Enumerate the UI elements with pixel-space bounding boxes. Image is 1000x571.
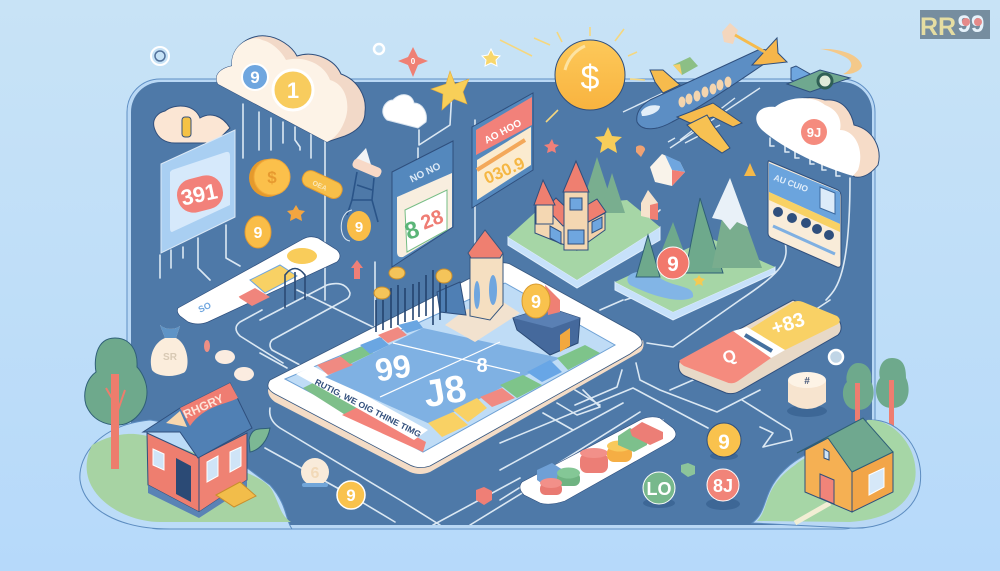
red ball 8J [706, 469, 740, 510]
chip tray [520, 417, 676, 504]
gold bar: OEA [311, 180, 328, 193]
game board: 99 [373, 347, 413, 389]
watermark RR99: RR [920, 13, 956, 41]
circuit lines [160, 90, 850, 525]
dice [650, 154, 685, 186]
arrow up [351, 260, 363, 279]
green ball LO [643, 472, 675, 508]
red ball 8J: 8J [713, 476, 733, 496]
small cloud left [154, 106, 230, 143]
billboard 391 [161, 130, 235, 253]
yellow ball 9 [707, 423, 741, 460]
info card: AU CUIO [772, 172, 810, 194]
coin 9 left: 9 [254, 225, 263, 242]
coin 9 bottom: 9 [346, 486, 356, 505]
left pill panel [177, 237, 340, 324]
fence [376, 270, 446, 332]
ticket panel: AO HOO [483, 118, 524, 147]
camera device [787, 49, 862, 92]
coin 9 bottom [337, 481, 365, 509]
lottery balls [301, 423, 741, 510]
cylinder: # [804, 376, 810, 387]
star gold [431, 71, 469, 110]
cloud with coins [217, 36, 365, 142]
schedule panel: NO NO [408, 161, 443, 185]
chips [537, 422, 663, 495]
coins on fence [374, 267, 452, 299]
red diamond [398, 47, 428, 77]
ticket right: Q [720, 345, 739, 368]
dollar coin [249, 159, 290, 197]
cream ball 6 [301, 458, 329, 487]
coin 1 [273, 70, 313, 110]
star [287, 205, 305, 221]
game board: 8 [476, 355, 488, 377]
star small [482, 49, 500, 66]
castle trees [580, 157, 625, 213]
billboard 391: 391 [179, 178, 220, 211]
cloud right [756, 98, 879, 177]
ticket right [679, 300, 841, 394]
roof sign: RHGRY [181, 391, 226, 421]
lake island [615, 178, 775, 320]
schedule panel: 28 [418, 206, 447, 235]
ticket panel: 030.9 [481, 153, 528, 188]
game board [313, 320, 600, 439]
cloud right: 9J [807, 125, 821, 140]
phone [268, 263, 644, 474]
sun coin: $ [581, 59, 600, 97]
clock tower [468, 230, 503, 320]
small marks [544, 127, 756, 176]
left pill panel: SO [197, 300, 213, 315]
cream ball 6: 6 [311, 465, 320, 482]
castle [534, 161, 606, 250]
yellow ball 9: 9 [718, 431, 730, 454]
coin 9 left [245, 216, 271, 248]
house: right [797, 418, 893, 512]
game board: RUTIG, WE OIG THINE TIMG [313, 377, 423, 439]
airplane [623, 23, 787, 153]
coin 1: 1 [287, 78, 299, 103]
sun coin [500, 27, 645, 122]
ring right [829, 350, 843, 364]
castle island [508, 157, 660, 288]
tower [347, 148, 383, 222]
green ball LO: LO [646, 479, 672, 499]
money bag [151, 325, 188, 376]
rings [151, 44, 384, 65]
right garden [752, 420, 921, 528]
house: left [143, 383, 270, 518]
ticket panel [472, 93, 533, 208]
schedule panel: 8 [401, 216, 423, 246]
game board: J8 [421, 368, 469, 416]
dollar coin: $ [267, 168, 277, 187]
cubes [476, 463, 695, 505]
gold bar [300, 168, 345, 201]
cone hut [641, 190, 658, 220]
watermark RR99 [920, 10, 990, 41]
schedule panel [392, 141, 453, 267]
blue building [513, 284, 580, 355]
left pill panel: 10 [229, 294, 242, 307]
coin 9: 9 [250, 68, 260, 87]
white cloud [383, 95, 426, 128]
info card [768, 161, 841, 267]
money bag: SR [163, 352, 178, 363]
tree [85, 338, 147, 468]
coin 9 tower: 9 [355, 219, 363, 236]
coin 9 tower [341, 210, 371, 241]
left garden [80, 338, 292, 529]
lake island: 9 [667, 253, 679, 276]
background panel [127, 79, 875, 529]
cylinder [787, 372, 827, 417]
watermark RR99: 99 [958, 11, 984, 38]
coin 9 [242, 64, 268, 90]
red diamond: 0 [411, 57, 416, 66]
small clouds [204, 340, 254, 381]
blue building: 9 [531, 292, 541, 312]
trees right [843, 358, 909, 434]
ticket right: +83 [769, 309, 808, 340]
